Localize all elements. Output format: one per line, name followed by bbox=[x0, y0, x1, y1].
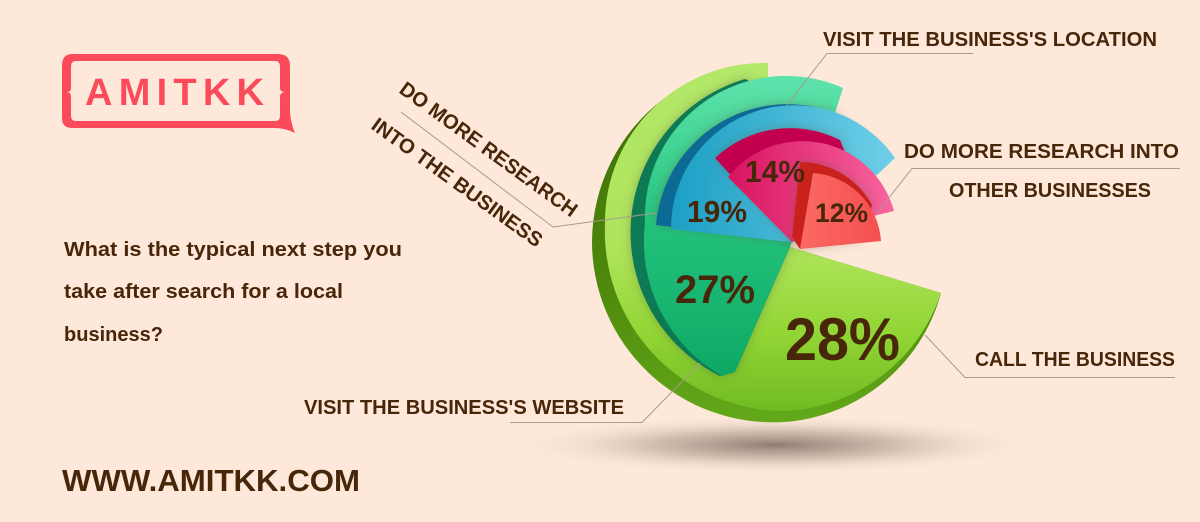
question text: business? bbox=[64, 323, 163, 346]
percent labels: 12% bbox=[815, 198, 868, 228]
ground shadow bbox=[510, 415, 1040, 475]
label: do more research into the business: INTO THE BUSINESS bbox=[367, 113, 547, 252]
logo: AMITKK speech bubble bbox=[62, 54, 295, 133]
slice: 19% research business, top face bbox=[671, 105, 895, 242]
label: do more research into other businesses: OTHER BUSINESSES bbox=[949, 179, 1151, 202]
slice: 14% other businesses, dark edge bbox=[715, 128, 860, 242]
slice: 12% location, top face bbox=[800, 173, 881, 249]
percent labels: 19% bbox=[687, 194, 747, 229]
slice: 14% other businesses, top face bbox=[728, 141, 894, 242]
slice: 27% website, top face bbox=[644, 76, 843, 376]
pie chart bbox=[592, 63, 941, 422]
leader lines bbox=[401, 54, 1180, 422]
slice: 19% research business, dark edge bbox=[656, 104, 860, 242]
label: do more research into other businesses: DO MORE RESEARCH INTO bbox=[904, 140, 1179, 163]
slice: 27% website, dark edge bbox=[631, 79, 790, 376]
website url: WWW.AMITKK.COM bbox=[62, 463, 360, 498]
slice: 12% location, dark edge bbox=[792, 162, 872, 249]
question text: What is the typical next step you bbox=[64, 238, 402, 261]
percent labels: 27% bbox=[675, 268, 755, 312]
percent labels: 14% bbox=[745, 154, 805, 189]
label: visit the business's location: VISIT THE BUSINESS'S LOCATION bbox=[823, 28, 1157, 51]
slice: 28% call the business, dark edge bbox=[592, 100, 941, 422]
logo: AMITKK speech bubble: AMITKK bbox=[85, 72, 265, 114]
slice: 28% call the business, light face and crescent bbox=[605, 63, 941, 411]
percent labels bbox=[675, 154, 900, 373]
label: do more research into other businesses bbox=[904, 140, 1179, 202]
label: visit the business's website: VISIT THE BUSINESS'S WEBSITE bbox=[304, 396, 624, 419]
percent labels: 28% bbox=[785, 306, 900, 373]
label: do more research into the business: DO MORE RESEARCH bbox=[395, 77, 582, 222]
question text: take after search for a local bbox=[64, 280, 343, 303]
question text bbox=[64, 238, 402, 346]
label: call the business: CALL THE BUSINESS bbox=[975, 348, 1175, 371]
